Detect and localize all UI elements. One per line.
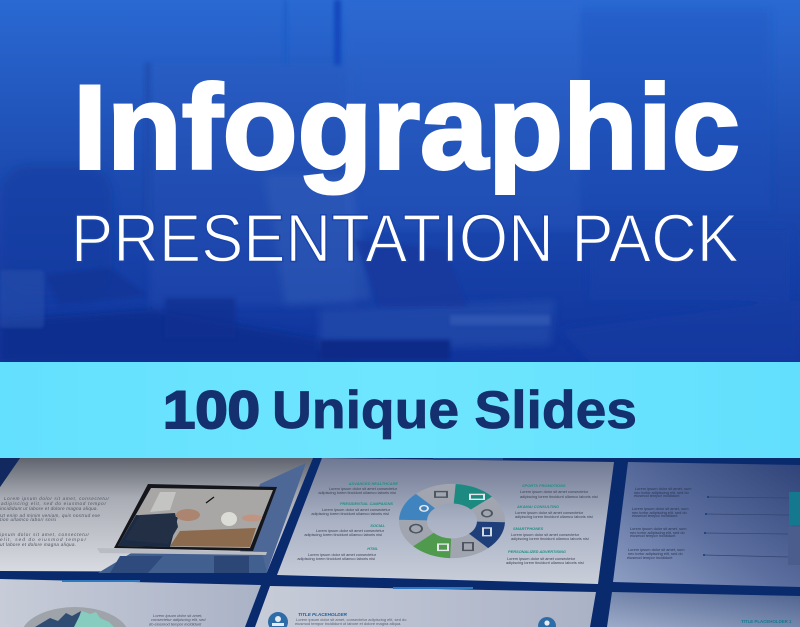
laptop (97, 484, 277, 555)
icon: person right (538, 617, 556, 627)
slide: bullet list: Lorem ipsum dolor sit amet, sum (632, 506, 688, 511)
slide: title placeholder 1: TITLE PLACEHOLDER 1 (741, 619, 792, 624)
slide: bullet list: nec tortor adipiscing elit, sed do (630, 530, 685, 535)
slide text: tion ullamco labori snisi (0, 517, 57, 522)
slide: title placeholder 1 (607, 592, 800, 627)
slide: area chart: Lorem ipsum dolor sit amet, (153, 613, 202, 618)
slide text: Lorem ipsum dolor sit amet, consectetur (4, 496, 109, 501)
area chart (24, 607, 126, 627)
slide mosaic background (0, 458, 800, 627)
right labels: Lorem ipsum dolor sit amet consectetur (515, 510, 584, 515)
right labels: Lorem ipsum dolor sit amet consectetur (520, 489, 589, 494)
banner text: 100 (163, 381, 260, 440)
left labels (297, 481, 398, 561)
slide: bullet list (613, 462, 800, 587)
slide: title placeholder (255, 586, 596, 627)
slide: bullet list: Lorem ipsum dolor sit amet, sum (630, 526, 686, 531)
right labels: Lorem ipsum dolor sit amet consectetur (507, 556, 576, 561)
left labels: adipiscing lorem tincidunt ullamco laboris nisi (304, 532, 382, 537)
slide: bullet list: nec tortor adipiscing elit, sed do (634, 490, 689, 495)
title: Infographic: Infographic (73, 60, 740, 194)
left labels: adipiscing lorem tincidunt ullamco laboris nisi (297, 556, 375, 561)
right labels: PERSONALIZED ADVERTISING (508, 549, 566, 554)
slide: area chart: do eiusmod tempor incididunt (149, 622, 202, 626)
left labels: adipiscing lorem tincidunt ullamco laboris nisi (311, 511, 389, 516)
slide: puzzle ring diagram (277, 458, 614, 584)
slide: title placeholder: eiusmod tempor incididunt ut labore et dolore magna aliqua. (295, 621, 401, 626)
right labels: SPORTS PROMOTIONS (522, 483, 566, 488)
slide: bullet list: eiusmod tempor incididunt (627, 555, 673, 560)
hero background: blue tinted office photo (0, 0, 800, 362)
left labels: SOCIAL (370, 523, 386, 528)
right labels: adipiscing lorem tincidunt ullamco laboris nisi (511, 536, 589, 541)
subtitle: Presentation Pack: PRESENTATION PACK (71, 200, 739, 276)
right labels (506, 483, 598, 565)
slide: bullet list: Lorem ipsum dolor sit amet, sum (628, 547, 684, 552)
slide: laptop photo (0, 458, 313, 573)
slide text: ipsum dolor sit amet, consectetur (0, 532, 89, 537)
right labels: AKAMAI CONSULTING (516, 504, 559, 509)
slide: area chart (0, 579, 261, 627)
slide text: Ut enim ad minim veniam, quis nostrud exe (0, 513, 100, 518)
left labels: Lorem ipsum dolor sit amet consectetur (329, 486, 398, 491)
right labels: SMARTPHONES (513, 526, 544, 531)
slide: bullet list: eiusmod tempor incididunt (630, 533, 676, 538)
slide: bullet list: eiusmod tempor incididunt (634, 493, 680, 498)
slide text (0, 496, 109, 547)
slide text: adipiscing elit, sed do eiusmod tempor (1, 501, 106, 506)
slide text: incididunt ut labore et dolore magna aliqua. (0, 506, 98, 511)
left labels: Lorem ipsum dolor sit amet consectetur (322, 507, 391, 512)
cyan banner (0, 362, 800, 458)
slide: bullet list: Lorem ipsum dolor sit amet, sum (635, 486, 691, 491)
slide: bullet list: nec tortor adipiscing elit, sed do (628, 551, 683, 556)
left labels: adipiscing lorem tincidunt ullamco laboris nisi (318, 490, 396, 495)
slide: bullet list: nec tortor adipiscing elit, sed do (632, 510, 687, 515)
icon: person left (268, 612, 288, 627)
left labels: PRESIDENTIAL CAMPAIGNS (340, 501, 393, 506)
slide text: ut labore et dolore magna aliqua. (0, 542, 76, 547)
left labels: Lorem ipsum dolor sit amet consectetur (316, 528, 385, 533)
slide: title placeholder: Lorem ipsum dolor sit amet, consectetur adipiscing elit, sed do (296, 617, 407, 622)
left labels: HTML (367, 546, 379, 551)
puzzle ring chart (410, 492, 494, 550)
right labels: adipiscing lorem tincidunt ullamco laboris nisi (515, 514, 593, 519)
heading: TITLE PLACEHOLDER (298, 612, 348, 617)
banner text: Unique Slides (272, 381, 637, 440)
right labels: Lorem ipsum dolor sit amet consectetur (511, 532, 580, 537)
slide text: elit, sed do eiusmod tempor (0, 537, 86, 542)
right labels: adipiscing lorem tincidunt ullamco laboris nisi (506, 560, 584, 565)
left labels: ADVANCED HEALTHCARE (348, 481, 398, 486)
right labels: adipiscing lorem tincidunt ullamco laboris nisi (520, 494, 598, 499)
slide: area chart: consectetur adipiscing elit, sed (151, 617, 206, 622)
left labels: Lorem ipsum dolor sit amet consectetur (308, 552, 377, 557)
slide: bullet list: eiusmod tempor incididunt (632, 513, 678, 518)
